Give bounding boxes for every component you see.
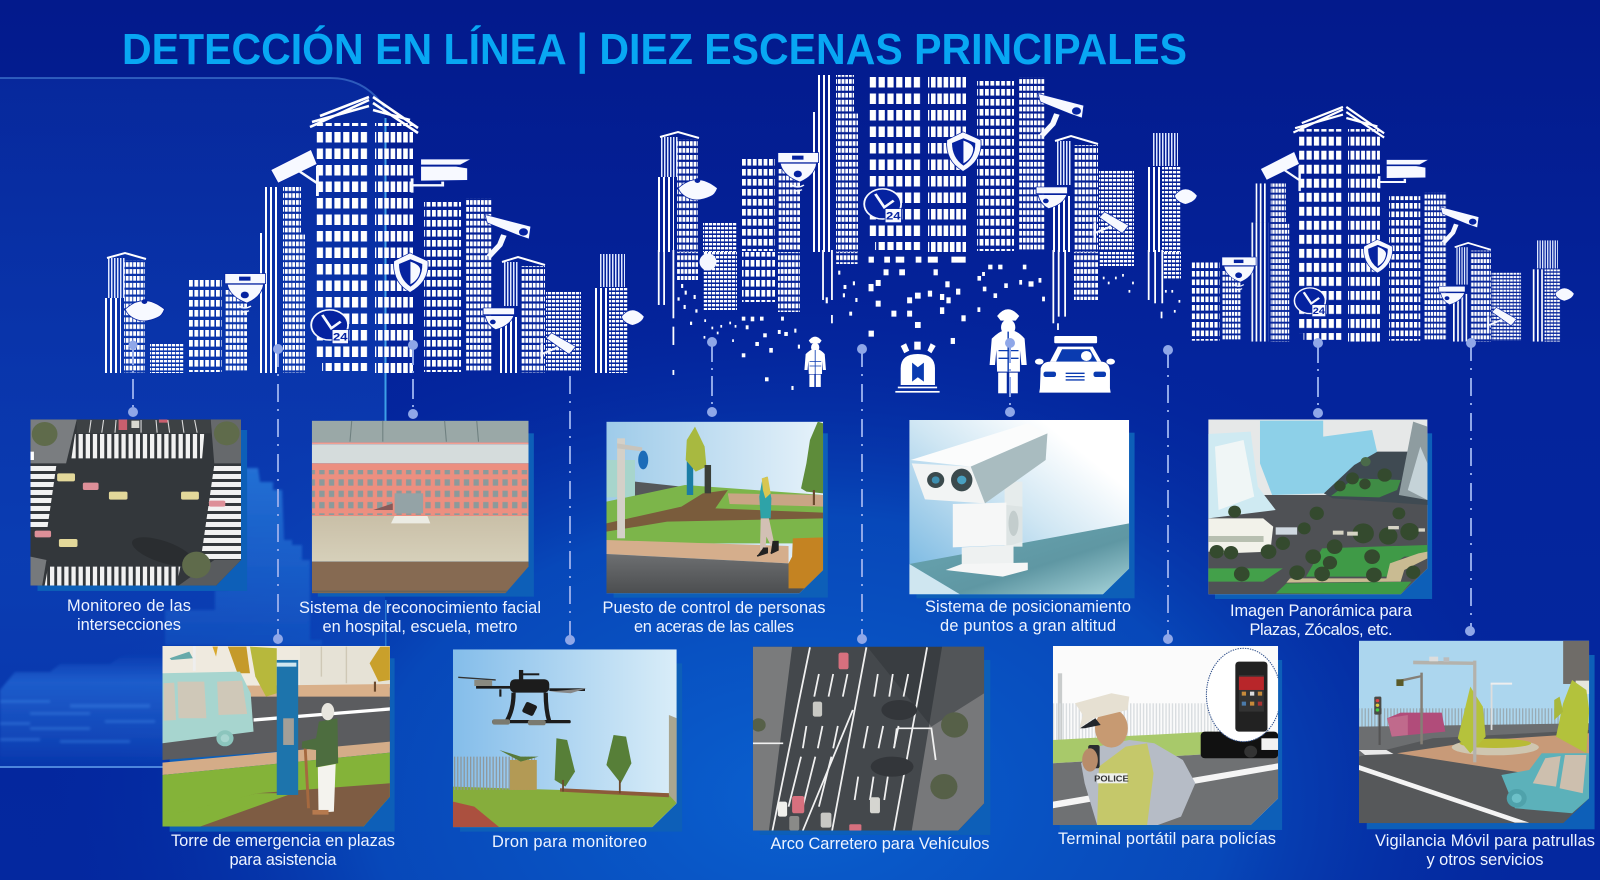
panel: police terminal: POLICE bbox=[1094, 774, 1129, 784]
panel: high altitude camera bbox=[909, 420, 1135, 598]
caption: checkpoint: en aceras de las calles bbox=[634, 618, 794, 636]
panel: panoramic view bbox=[1208, 419, 1432, 599]
pin 4 bbox=[565, 376, 575, 645]
caption: positioning: Sistema de posicionamiento bbox=[925, 598, 1131, 616]
city skyline: centre cluster bbox=[658, 75, 1198, 394]
caption: mobile: Vigilancia Móvil para patrullas bbox=[1375, 832, 1595, 850]
building: small block bbox=[150, 344, 184, 373]
caption: facial recognition bbox=[299, 599, 541, 636]
icon: alarm beacon bbox=[895, 342, 940, 393]
caption: facial recognition: en hospital, escuela, metro bbox=[322, 618, 518, 636]
icon: hooded camera bbox=[412, 159, 470, 193]
icons in cluster bbox=[225, 150, 644, 363]
dissolving pixels and long lines bbox=[658, 250, 1180, 393]
caption: facial recognition: Sistema de reconocimiento facial bbox=[299, 599, 541, 617]
caption: drone: Dron para monitoreo bbox=[492, 833, 647, 851]
caption: panoramic: Plazas, Zócalos, etc. bbox=[1250, 621, 1392, 639]
caption: arch: Arco Carretero para Vehículos bbox=[770, 835, 990, 853]
icon: bullet camera bbox=[271, 150, 317, 196]
outer left buildings and cap bbox=[104, 253, 184, 373]
caption: mobile: y otros servicios bbox=[1426, 851, 1544, 869]
icon: police cap bbox=[126, 299, 164, 321]
data band decoration bbox=[0, 654, 165, 766]
building: far right tower bbox=[594, 254, 628, 373]
building: main tower bbox=[310, 97, 418, 373]
caption: mobile bbox=[1375, 832, 1595, 869]
caption: intersections bbox=[67, 597, 191, 634]
building: right block bbox=[424, 198, 492, 372]
lower window extensions bbox=[677, 252, 1181, 312]
pin 1 bbox=[128, 340, 138, 417]
caption: checkpoint: Puesto de control de personas bbox=[602, 599, 826, 617]
caption: positioning bbox=[925, 598, 1131, 635]
icon: 24h clock: 24 bbox=[333, 331, 348, 343]
city core buildings and icons bbox=[189, 97, 644, 373]
caption: panoramic: Imagen Panorámica para bbox=[1230, 602, 1413, 620]
panel: police terminal bbox=[1053, 646, 1282, 830]
icon: small officer bbox=[804, 337, 826, 387]
caption: checkpoint bbox=[602, 599, 826, 636]
caption: emergency tower: Torre de emergencia en plazas bbox=[171, 832, 395, 850]
building: fine striped block bbox=[546, 292, 581, 372]
building: striped tower bbox=[499, 257, 545, 373]
title: DETECCIÓN EN LÍNEA | DIEZ ESCENAS PRINCIPALES bbox=[122, 24, 1187, 75]
icon: dome camera with barcode bbox=[225, 274, 265, 312]
icon: small camera bbox=[542, 333, 575, 363]
caption: emergency tower: para asistencia bbox=[230, 851, 337, 869]
panel: vehicle arch bbox=[751, 647, 990, 835]
pin 8 bbox=[1163, 345, 1173, 644]
pin 2 bbox=[273, 344, 283, 644]
connector pins bbox=[128, 337, 1476, 645]
icon: police car bbox=[1035, 336, 1115, 393]
panel: sidewalk checkpoint bbox=[606, 422, 828, 598]
icon: police cap right bbox=[622, 310, 644, 325]
caption: intersections: intersecciones bbox=[77, 616, 181, 634]
building: far left tower bbox=[104, 253, 146, 373]
pin 9 bbox=[1313, 338, 1323, 418]
pin 5 bbox=[707, 337, 717, 417]
pin 6 bbox=[857, 344, 867, 644]
pin 7 bbox=[1005, 338, 1015, 417]
building: slim tower bbox=[260, 187, 305, 373]
icon: shield bbox=[394, 253, 428, 292]
city skyline: right cluster bbox=[1192, 107, 1574, 342]
building: left block bbox=[189, 280, 247, 372]
caption: emergency tower bbox=[171, 832, 395, 869]
city skyline: left cluster bbox=[104, 97, 644, 373]
icon: dome camera bbox=[483, 308, 514, 329]
panel: intersection monitoring bbox=[30, 419, 247, 591]
caption: panoramic bbox=[1230, 602, 1413, 639]
panel: mobile surveillance bbox=[1359, 641, 1595, 829]
left rounded panel bbox=[0, 78, 386, 768]
icon: 24h clock bbox=[312, 311, 348, 343]
histogram decoration bbox=[165, 468, 322, 645]
pin 10 bbox=[1465, 338, 1476, 636]
panel: facial recognition bbox=[312, 421, 534, 597]
icon: officer bbox=[990, 309, 1027, 393]
icon: angled camera bbox=[486, 215, 530, 257]
caption: intersections: Monitoreo de las bbox=[67, 597, 191, 615]
centre buildings bbox=[658, 75, 1198, 252]
caption: terminal: Terminal portátil para policías bbox=[1058, 830, 1276, 848]
caption: positioning: de puntos a gran altitud bbox=[940, 617, 1116, 635]
pin 3 bbox=[408, 340, 418, 419]
panel: emergency tower bbox=[162, 646, 395, 832]
panel: drone bbox=[453, 649, 682, 832]
